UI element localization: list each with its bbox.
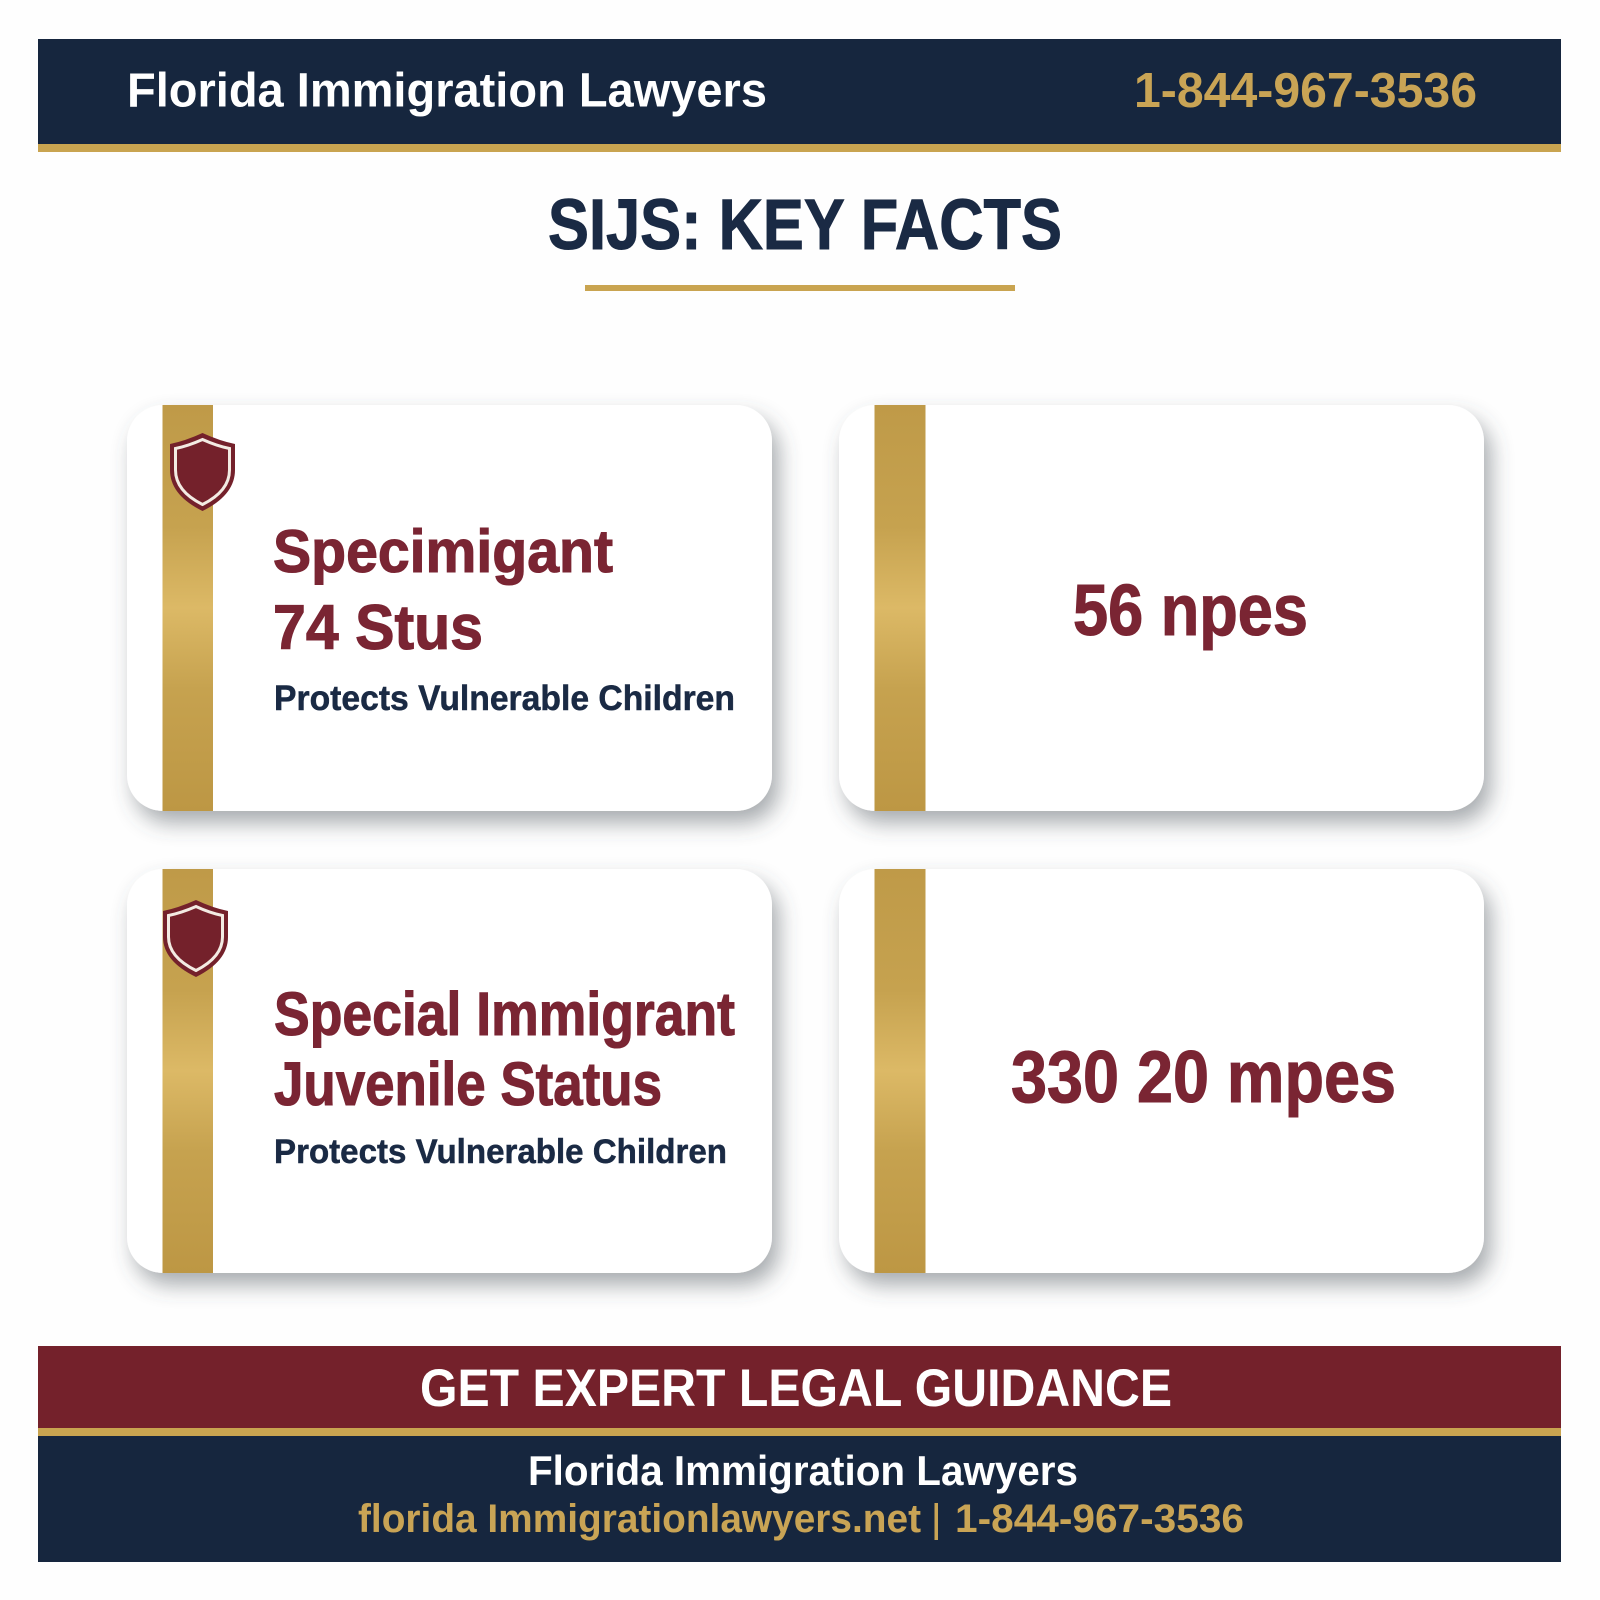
footer gold divider xyxy=(38,1428,1561,1436)
footer contact band xyxy=(38,1436,1561,1562)
card heading: 74 Stus xyxy=(273,593,483,663)
gold side bar xyxy=(874,869,926,1273)
panel: bottom-right card xyxy=(839,869,1484,1273)
title underline xyxy=(585,285,1015,291)
card heading: Juvenile Status xyxy=(274,1050,662,1118)
gold side bar xyxy=(162,405,213,811)
panel: bottom-left card xyxy=(127,869,772,1273)
footer website and phone xyxy=(358,1497,1244,1541)
card subtext: Protects Vulnerable Children xyxy=(274,679,735,718)
footer website and phone: 1-844-967-3536 xyxy=(955,1497,1244,1541)
card heading: Special Immigrant xyxy=(274,980,735,1048)
card subtext: Protects Vulnerable Children xyxy=(274,1133,727,1171)
header bar xyxy=(38,39,1561,152)
card stat: 56 npes xyxy=(1073,571,1308,651)
header firm name: Florida Immigration Lawyers xyxy=(127,64,767,118)
panel: top-right card xyxy=(839,405,1484,811)
panel: top-left card xyxy=(127,405,772,811)
footer firm name: Florida Immigration Lawyers xyxy=(528,1447,1078,1494)
footer website and phone: florida Immigrationlawyers.net xyxy=(358,1497,921,1541)
card heading: Specimigant xyxy=(273,518,613,585)
card heading xyxy=(273,518,613,663)
footer call-to-action band xyxy=(38,1346,1561,1428)
icon: shield xyxy=(170,433,235,511)
header phone number: 1-844-967-3536 xyxy=(1134,64,1477,118)
gold side bar xyxy=(162,869,213,1273)
gold side bar xyxy=(874,405,926,811)
card stat: 330 20 mpes xyxy=(1011,1037,1396,1118)
card heading xyxy=(274,980,735,1118)
call-to-action text: GET EXPERT LEGAL GUIDANCE xyxy=(420,1359,1172,1418)
icon: shield xyxy=(163,900,228,977)
title: SIJS: KEY FACTS xyxy=(548,186,1062,265)
